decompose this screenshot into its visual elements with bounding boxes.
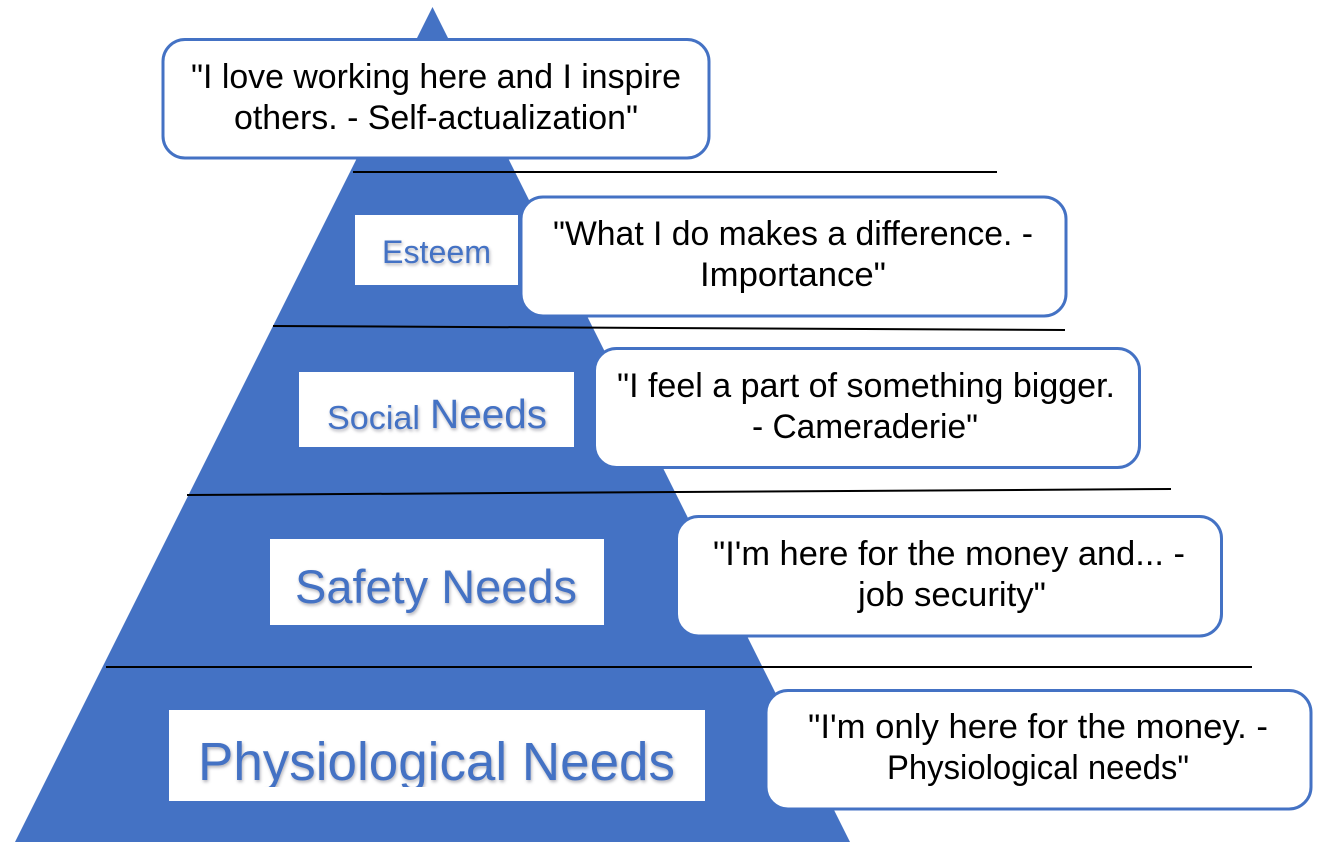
callout: job security xyxy=(676,516,1222,636)
callout: physiological needs: Physiological needs" xyxy=(887,749,1189,787)
label: Safety Needs: Safety Needs xyxy=(295,560,577,613)
label: Esteem: Esteem xyxy=(382,234,491,270)
label: Physiological Needs xyxy=(169,710,705,801)
label: Social Needs xyxy=(299,372,574,447)
label: Social Needs: Social xyxy=(327,399,420,436)
pyramid xyxy=(15,7,850,842)
callout: self-actualization xyxy=(163,40,709,158)
callout: importance xyxy=(521,197,1066,316)
callout: importance: Importance" xyxy=(700,256,886,294)
callout: camaraderie: "I feel a part of something bigger. xyxy=(617,367,1115,405)
callout: self-actualization: others. - Self-actualization" xyxy=(234,99,638,137)
label: Social Needs: Needs xyxy=(430,391,547,437)
label: Safety Needs xyxy=(270,539,604,625)
level divider lines xyxy=(106,172,1252,667)
callout: job security: job security" xyxy=(857,576,1046,614)
callout: job security: "I'm here for the money and... - xyxy=(713,535,1185,573)
callout: self-actualization: "I love working here and I inspire xyxy=(191,58,681,96)
callout: camaraderie xyxy=(594,348,1140,468)
callout: importance: "What I do makes a difference. - xyxy=(553,215,1033,253)
label: Esteem xyxy=(355,215,518,285)
callout: physiological needs: "I'm only here for the money. - xyxy=(808,708,1268,746)
callout: physiological needs xyxy=(766,690,1311,809)
callout: camaraderie: - Cameraderie" xyxy=(752,408,978,446)
label: Physiological Needs: Physiological Needs xyxy=(198,732,675,792)
